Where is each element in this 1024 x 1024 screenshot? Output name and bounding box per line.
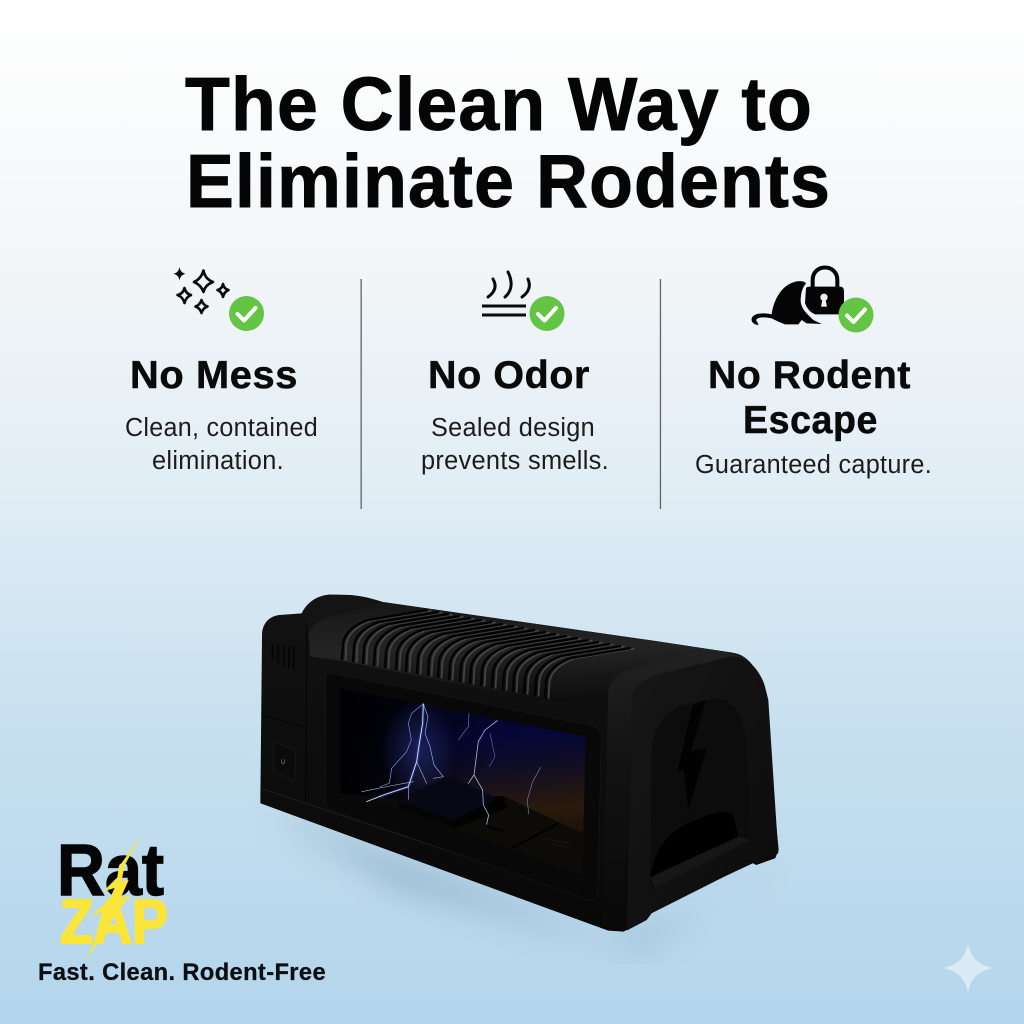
icon: rodent with padlock and green check — [752, 267, 874, 332]
product shadow — [262, 806, 785, 950]
end cap highlight — [302, 595, 383, 633]
title: The Clean Way to — [185, 62, 813, 146]
tagline: Fast. Clean. Rodent-Free — [38, 959, 326, 986]
text: no odor description — [421, 414, 609, 475]
text: no mess description — [125, 414, 318, 475]
side face — [627, 657, 778, 931]
trap floor — [344, 794, 582, 852]
heading: no rodent escape: Escape — [743, 399, 878, 442]
title: Eliminate Rodents — [186, 139, 831, 223]
logo: RatZAP: ZAP — [60, 888, 168, 957]
logo: RatZAP: Rat — [57, 831, 164, 911]
logo: RatZAP — [57, 831, 168, 962]
side opening hole — [650, 812, 738, 877]
icon: sparkle watermark — [943, 943, 993, 993]
opening lip — [650, 837, 751, 889]
left module seam and vents — [260, 623, 594, 900]
trap plates — [398, 777, 572, 849]
device top surface — [309, 602, 732, 703]
text: no rodent escape description: Guaranteed capture. — [695, 451, 932, 479]
window bezel — [325, 673, 601, 901]
corner chamfer — [602, 649, 765, 930]
window assembly — [325, 673, 601, 901]
panel: no rodent escape — [695, 267, 932, 479]
heading: no mess: No Mess — [130, 354, 298, 397]
side arch recess — [650, 698, 752, 889]
icon: odor waves with green check — [482, 272, 564, 331]
text: no mess description: Clean, contained — [125, 414, 318, 442]
bolt emblem — [677, 700, 707, 810]
text: no odor description: prevents smells. — [421, 447, 609, 475]
heading: no rodent escape: No Rodent — [708, 354, 911, 397]
heading: no rodent escape — [708, 354, 911, 442]
panel: no mess — [125, 269, 318, 475]
icon: sparkles with green check — [175, 269, 264, 331]
lightning arcs — [362, 704, 541, 824]
product: rat zapper device — [260, 595, 779, 932]
text: no mess description: elimination. — [152, 447, 284, 475]
heading: no odor: No Odor — [428, 354, 590, 397]
text: no odor description: Sealed design — [431, 414, 595, 442]
cooling ribs — [342, 610, 634, 698]
device shell — [260, 595, 779, 932]
icon: lightning bolt — [85, 836, 141, 962]
device body — [260, 595, 779, 932]
panel: no odor — [421, 272, 609, 475]
title — [185, 62, 831, 223]
device end cap — [602, 649, 778, 931]
power switch — [273, 742, 295, 781]
window screen — [382, 702, 586, 850]
